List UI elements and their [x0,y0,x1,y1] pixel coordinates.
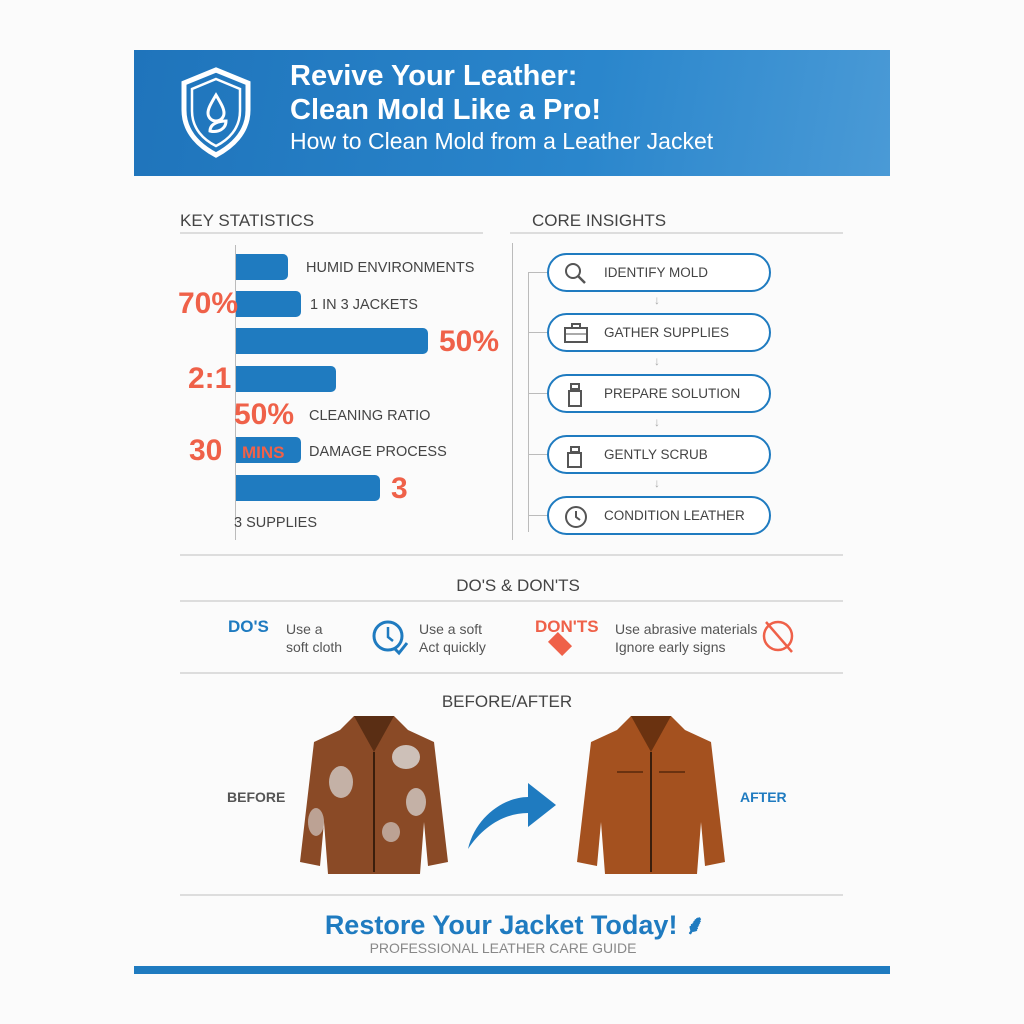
bar chart: 50% [234,398,294,431]
bar chart: DAMAGE PROCESS [309,444,447,460]
icon: prohibited [762,620,794,653]
arrows between steps: ↓ [654,476,660,490]
bar chart: MINS [242,443,284,462]
arrows between steps: ↓ [654,354,660,368]
icon: shield [182,67,250,158]
arrow [468,783,556,849]
arrows between steps: ↓ [654,415,660,429]
bar chart [178,254,499,531]
bar chart: 1 IN 3 JACKETS [310,297,418,313]
arrows between steps [654,293,660,490]
subtitle: How to Clean Mold from a Leather Jacket [290,128,713,154]
bar chart: HUMID ENVIRONMENTS [306,260,474,276]
label: before: BEFORE [227,789,285,805]
bar chart: 30 [189,434,222,467]
do's & don'ts row: Use a [286,621,323,637]
title: Clean Mold Like a Pro! [290,94,601,126]
do's & don'ts row: soft cloth [286,639,342,655]
step: gather supplies: GATHER SUPPLIES [604,325,729,340]
image: jacket before [300,716,448,874]
heading: before/after: BEFORE/AFTER [442,692,572,711]
do's & don'ts row: Use a soft [419,621,482,637]
footer title: Restore Your Jacket Today! ⸙ [325,910,705,940]
footer bar [134,966,890,974]
arrows between steps: ↓ [654,293,660,307]
step: identify mold: IDENTIFY MOLD [604,265,708,280]
step: gently scrub: GENTLY SCRUB [604,447,708,462]
footer subtitle: PROFESSIONAL LEATHER CARE GUIDE [370,940,636,956]
bar chart: 2:1 [188,362,231,395]
do's & don'ts row: Ignore early signs [615,639,726,655]
label: after: AFTER [740,789,787,805]
do's & don'ts row [228,617,794,656]
heading: CORE INSIGHTS [532,211,666,230]
bar chart: 70% [178,287,238,320]
image: jacket after [577,716,725,874]
step: identify mold [547,253,771,292]
bar chart: 3 [391,472,408,505]
heading: KEY STATISTICS [180,211,314,230]
bar chart: 50% [439,325,499,358]
step: condition leather [547,496,771,535]
bar chart: CLEANING RATIO [309,408,430,424]
step: condition leather: CONDITION LEATHER [604,508,745,523]
step: prepare solution [547,374,771,413]
header banner [134,50,890,176]
step: gather supplies [547,313,771,352]
title: Revive Your Leather: [290,60,577,92]
step: prepare solution: PREPARE SOLUTION [604,386,740,401]
step: gently scrub [547,435,771,474]
bar chart: 3 SUPPLIES [234,515,317,531]
heading: do's & don'ts: DO'S & DON'TS [456,576,580,595]
do's & don'ts row: DON'TS [535,617,599,636]
do's & don'ts row: DO'S [228,617,269,636]
do's & don'ts row: Act quickly [419,639,486,655]
title [290,60,601,126]
do's & don'ts row: Use abrasive materials [615,621,757,637]
icon: clock check [372,620,408,656]
